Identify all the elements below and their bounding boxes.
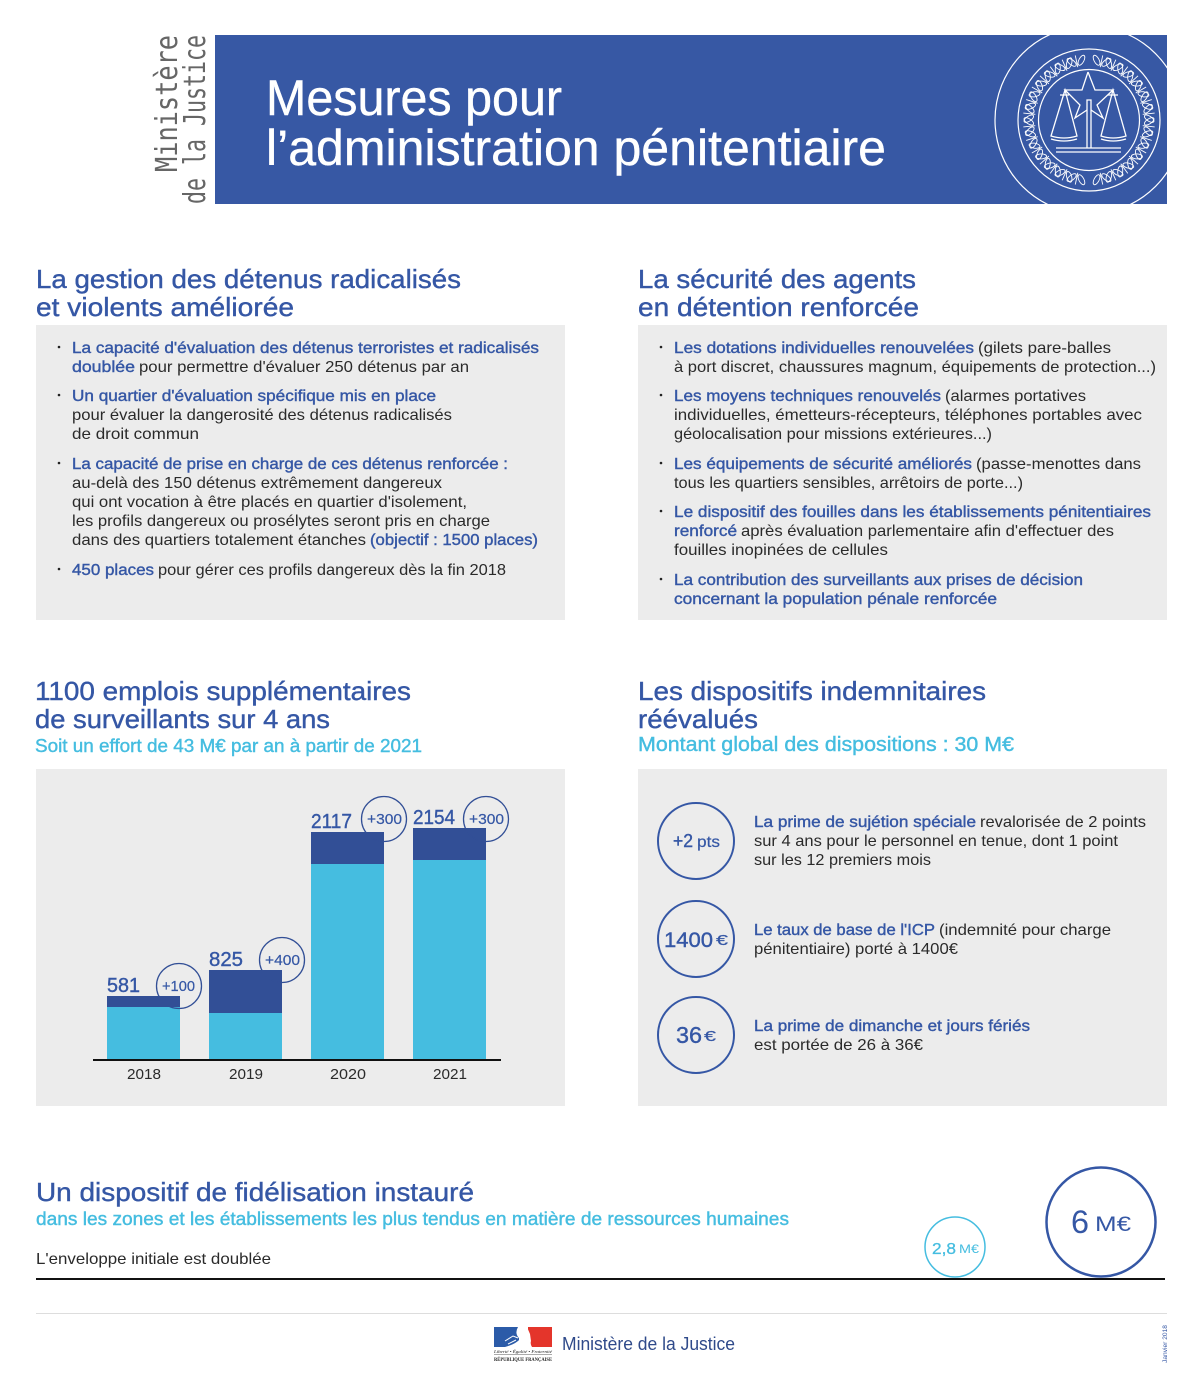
panel: sécurité des agents: (passe-menottes dans xyxy=(976,456,1141,473)
bar 2019: 2019 xyxy=(229,1066,263,1083)
item: +2 pts: +2 xyxy=(673,831,693,851)
heading: sécurité des agents xyxy=(638,264,919,322)
panel: sécurité des agents xyxy=(638,325,1167,620)
bar 2018 xyxy=(107,964,202,1083)
panel: détenus radicalisés: au-delà des 150 détenus extrêmement dangereux xyxy=(72,475,442,492)
item: 1400 €: (indemnité pour charge xyxy=(939,922,1111,939)
icon: justice seal xyxy=(994,35,1167,204)
panel: détenus radicalisés xyxy=(36,325,565,620)
bar 2019 xyxy=(209,938,304,1083)
heading: dispositifs indemnitaires: Les dispositifs indemnitaires xyxy=(638,676,986,706)
panel: sécurité des agents: tous les quartiers sensibles, arrêtoirs de porte...) xyxy=(674,475,1023,492)
panel: détenus radicalisés: de droit commun xyxy=(72,426,199,443)
title xyxy=(266,70,886,176)
panel: sécurité des agents: Les équipements de sécurité améliorés xyxy=(674,456,972,473)
bar 2021: 2154 xyxy=(413,807,455,829)
bar 2020 xyxy=(311,796,406,1083)
panel: détenus radicalisés: La capacité de prise en charge de ces détenus renforcée : xyxy=(72,456,508,473)
item: 36 €: est portée de 26 à 36€ xyxy=(754,1037,923,1054)
panel: dispositifs indemnitaires xyxy=(638,769,1167,1106)
comparison circles: M€ xyxy=(1095,1213,1131,1236)
panel: détenus radicalisés: (objectif : 1500 places) xyxy=(370,532,538,549)
item: 1400 €: Le taux de base de l'ICP xyxy=(754,922,935,939)
panel: sécurité des agents: à port discret, chaussures magnum, équipements de protection...) xyxy=(674,359,1156,376)
item: 1400 €: pénitentiaire) porté à 1400€ xyxy=(754,941,958,958)
heading: emplois supplémentaires xyxy=(35,676,422,756)
panel: sécurité des agents: Les moyens techniques renouvelés xyxy=(674,388,941,405)
panel: sécurité des agents: concernant la population pénale renforcée xyxy=(674,591,997,608)
heading: détenus radicalisés: La gestion des détenus radicalisés xyxy=(36,264,461,294)
heading: dispositifs indemnitaires xyxy=(638,676,1014,756)
panel: détenus radicalisés: pour gérer ces profils dangereux dès la fin 2018 xyxy=(158,562,506,579)
footer: date: Janvier 2018 xyxy=(1162,1325,1169,1363)
item: 1400 € xyxy=(658,901,1111,977)
text: enveloppe initiale: L'enveloppe initiale est doublée xyxy=(36,1251,271,1268)
bar 2020: 2020 xyxy=(330,1066,366,1083)
heading: sécurité des agents: en détention renforcée xyxy=(638,292,919,322)
footer: ministry name: Ministère de la Justice xyxy=(562,1334,735,1354)
item: 1400 €: 1400 xyxy=(664,929,713,952)
panel: détenus radicalisés: pour évaluer la dangerosité des détenus radicalisés xyxy=(72,407,452,424)
panel: sécurité des agents: Le dispositif des fouilles dans les établissements pénitentiaires xyxy=(674,504,1151,521)
heading: dispositif de fidélisation: Un dispositif de fidélisation instauré xyxy=(36,1177,474,1207)
footer logo: République française: RÉPUBLIQUE FRANÇAISE xyxy=(494,1355,552,1363)
footer logo: République française xyxy=(493,1327,553,1363)
panel: sécurité des agents: géolocalisation pour missions extérieures...) xyxy=(674,426,992,443)
panel: bar chart xyxy=(36,769,565,1106)
heading: dispositifs indemnitaires: réévalués xyxy=(638,704,758,734)
panel: détenus radicalisés: pour permettre d'évaluer 250 détenus par an xyxy=(139,359,469,376)
panel: détenus radicalisés: Un quartier d'évaluation spécifique mis en place xyxy=(72,388,436,405)
comparison circles: M€ xyxy=(959,1242,979,1256)
comparison circles: 2,8 xyxy=(932,1241,956,1258)
item: +2 pts: sur les 12 premiers mois xyxy=(754,852,931,869)
comparison circles: 6 xyxy=(1071,1204,1089,1240)
heading: emplois supplémentaires: 1100 emplois supplémentaires xyxy=(35,676,411,706)
title: Mesures pour xyxy=(266,70,562,126)
bar 2021: +300 xyxy=(469,811,504,828)
item: +2 pts: sur 4 ans pour le personnel en tenue, dont 1 point xyxy=(754,833,1119,850)
heading: emplois supplémentaires: de surveillants sur 4 ans xyxy=(35,704,330,734)
item: +2 pts xyxy=(658,803,1146,879)
bar 2020: 2117 xyxy=(311,811,352,833)
item: +2 pts: pts xyxy=(697,834,720,851)
bar 2020: +300 xyxy=(367,811,402,828)
heading: emplois supplémentaires: Soit un effort de 43 M€ par an à partir de 2021 xyxy=(35,736,422,756)
panel: sécurité des agents: après évaluation parlementaire afin d'effectuer des xyxy=(741,523,1114,540)
bar 2018: 2018 xyxy=(127,1066,161,1083)
bar 2021: 2021 xyxy=(433,1066,467,1083)
panel: détenus radicalisés: dans des quartiers totalement étanches xyxy=(72,532,366,549)
item: 1400 €: € xyxy=(716,932,729,949)
panel: détenus radicalisés: 450 places xyxy=(72,562,154,579)
heading: sécurité des agents: La sécurité des agents xyxy=(638,264,916,294)
footer logo: République française: Liberté • Égalité • Fraternité xyxy=(493,1349,553,1354)
panel: sécurité des agents: fouilles inopinées de cellules xyxy=(674,542,888,559)
panel: sécurité des agents: La contribution des surveillants aux prises de décision xyxy=(674,572,1083,589)
item: +2 pts: revalorisée de 2 points xyxy=(980,814,1146,831)
panel: sécurité des agents: Les dotations individuelles renouvelées xyxy=(674,340,974,357)
comparison circles xyxy=(36,1168,1165,1280)
header banner xyxy=(215,35,1167,204)
bar 2021 xyxy=(413,796,508,1083)
item: 36 €: 36 xyxy=(676,1022,702,1048)
side label: Ministère de la Justice: Ministère xyxy=(150,35,185,172)
heading: dispositifs indemnitaires: Montant global des dispositions : 30 M€ xyxy=(638,734,1014,756)
item: 36 € xyxy=(658,997,1030,1073)
bar 2019: +400 xyxy=(265,952,300,969)
heading: détenus radicalisés: et violents améliorée xyxy=(36,292,294,322)
panel: sécurité des agents: renforcé xyxy=(674,523,737,540)
panel: détenus radicalisés: les profils dangereux ou prosélytes seront pris en charge xyxy=(72,513,490,530)
heading: dispositif de fidélisation xyxy=(36,1177,789,1229)
panel: sécurité des agents: (gilets pare-balles xyxy=(978,340,1111,357)
panel: détenus radicalisés: qui ont vocation à être placés en quartier d'isolement, xyxy=(72,494,467,511)
panel: sécurité des agents: (alarmes portatives xyxy=(945,388,1086,405)
side label: Ministère de la Justice xyxy=(150,35,213,204)
bar 2019: 825 xyxy=(209,949,243,971)
panel: détenus radicalisés: La capacité d'évaluation des détenus terroristes et radicalisés xyxy=(72,340,539,357)
bar 2018: +100 xyxy=(162,978,195,995)
item: +2 pts: La prime de sujétion spéciale xyxy=(754,814,976,831)
title: l’administration pénitentiaire xyxy=(266,120,886,176)
heading: dispositif de fidélisation: dans les zones et les établissements les plus tendus en matière de ressources humaines xyxy=(36,1209,789,1229)
heading: détenus radicalisés xyxy=(36,264,461,322)
panel: sécurité des agents: individuelles, émetteurs-récepteurs, téléphones portables avec xyxy=(674,407,1142,424)
bar 2018: 581 xyxy=(107,975,140,997)
item: 36 €: La prime de dimanche et jours fériés xyxy=(754,1018,1030,1035)
panel: détenus radicalisés: doublée xyxy=(72,359,135,376)
item: 36 €: € xyxy=(704,1028,717,1045)
